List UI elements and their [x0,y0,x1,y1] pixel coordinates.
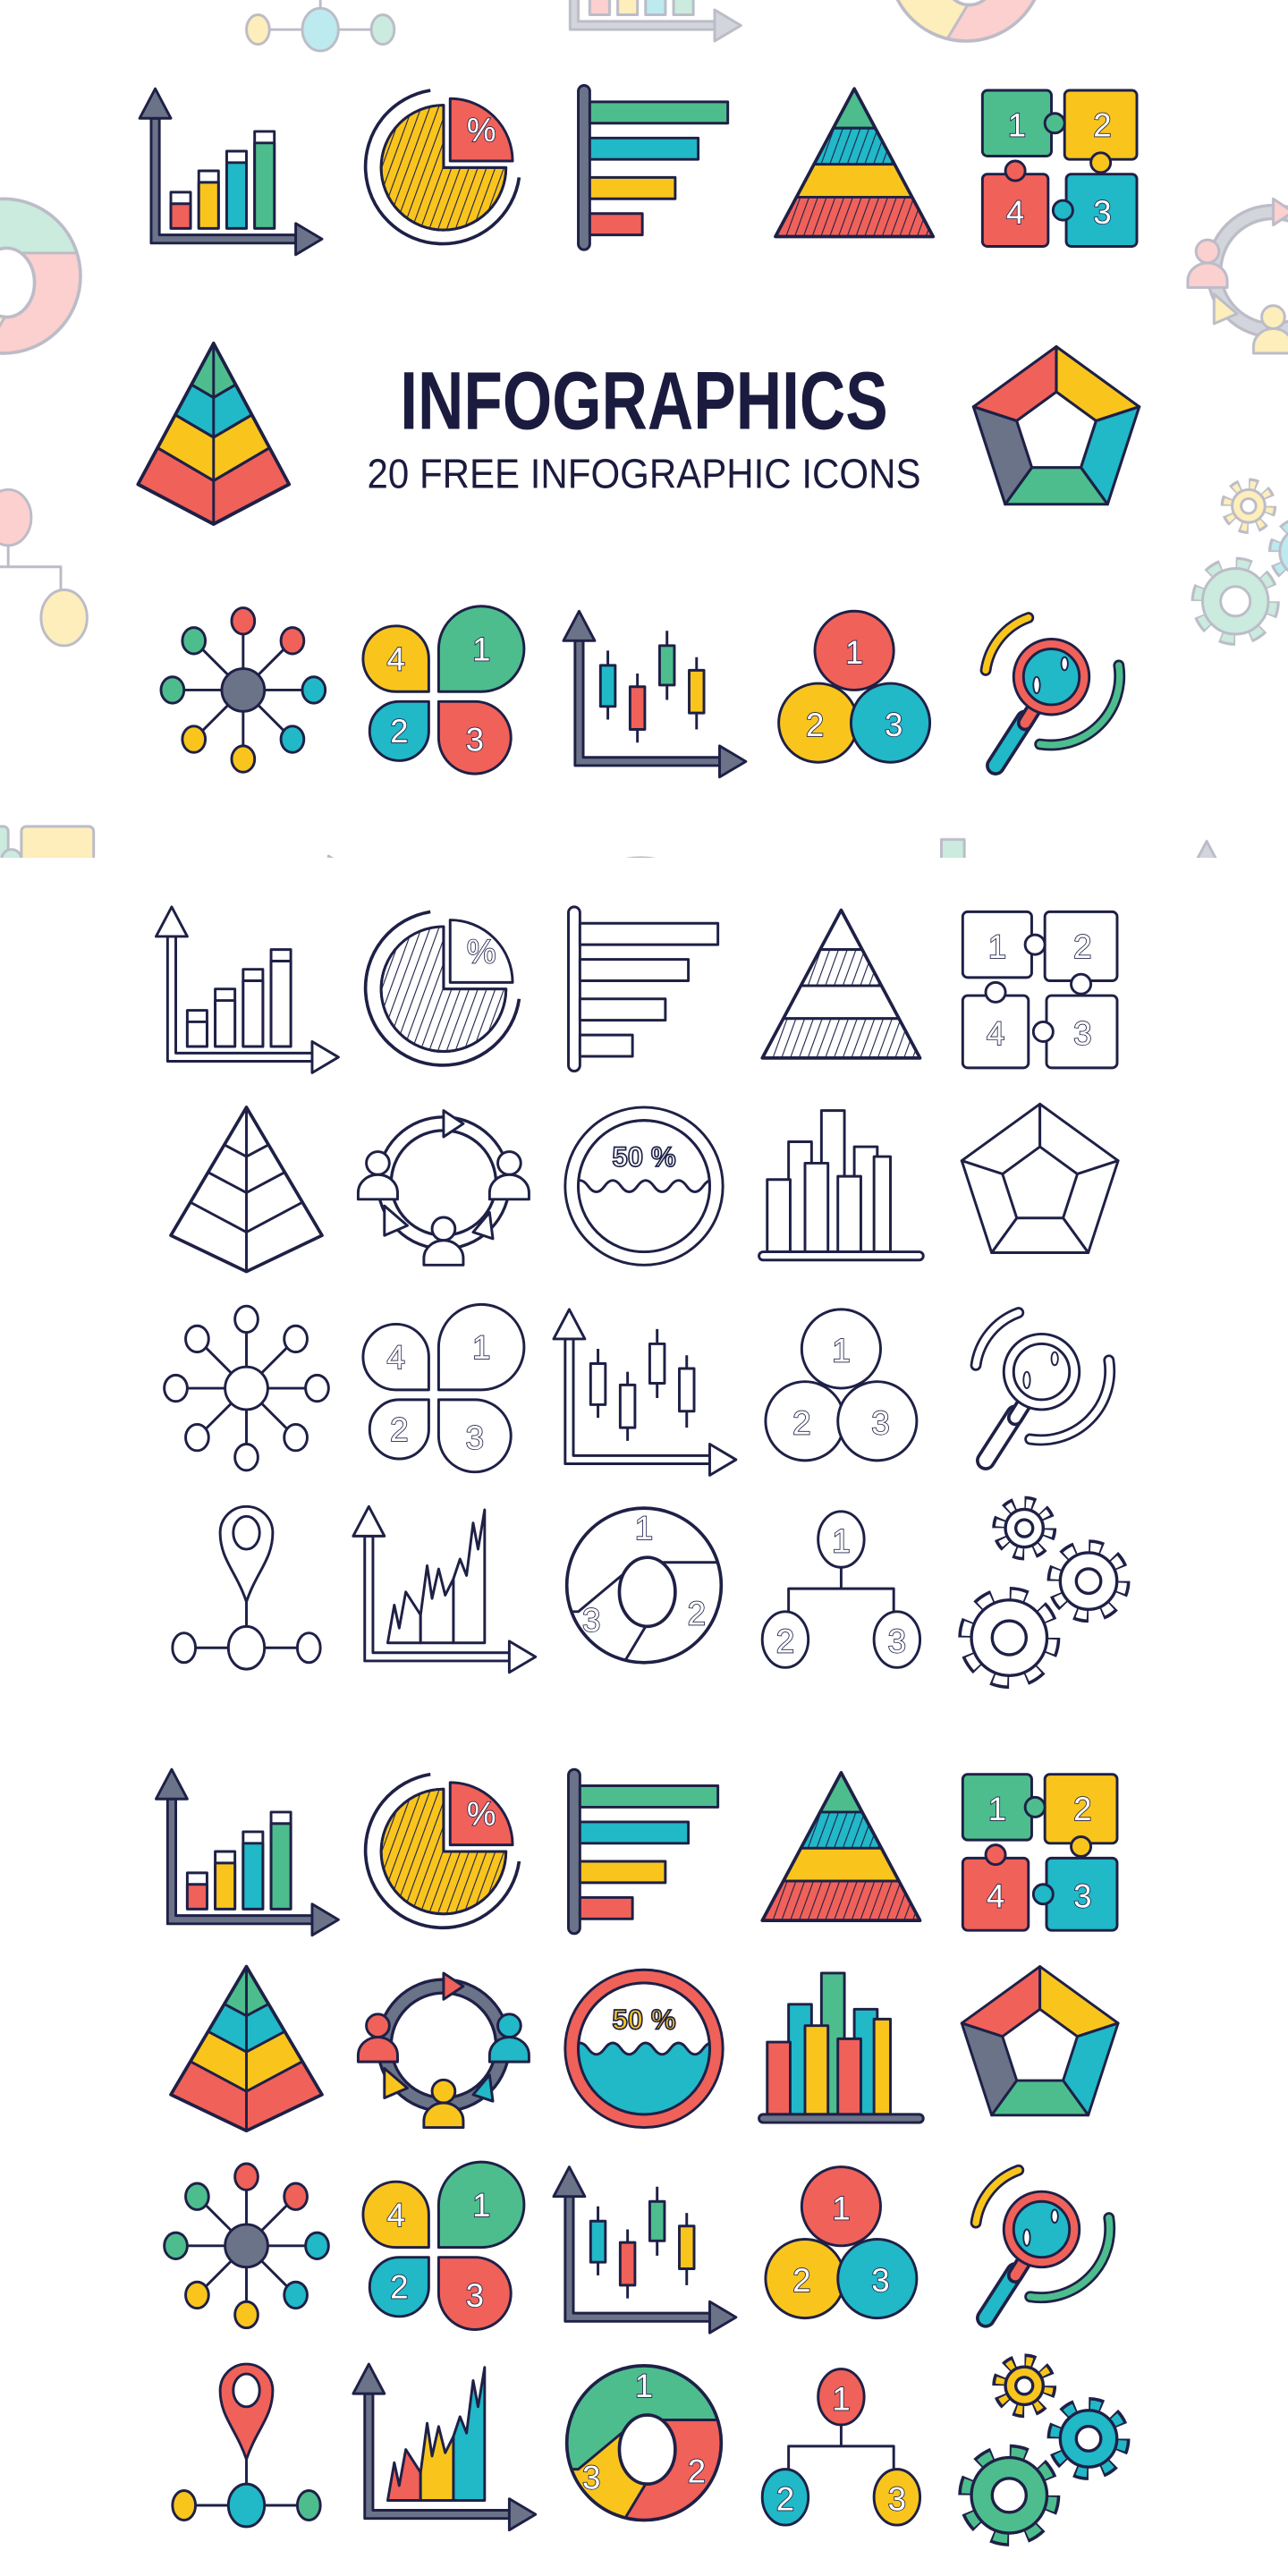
icon: area chart [353,2364,536,2530]
icon: puzzle [962,911,1117,1068]
icon: donut chart: 2 [688,2453,706,2489]
icon: petals [363,606,524,774]
icon: puzzle: 4 [1006,194,1024,231]
icon: 3D pyramid [148,1091,345,1280]
panel: top colored hero section [115,86,1140,777]
icon: puzzle: 2 [1073,928,1092,965]
panel: colored icons [148,1769,1122,2541]
icon: pie chart [366,911,519,1065]
icon: pyramid triangle [759,907,923,1062]
icon: pentagon [973,347,1140,504]
icon: three circles [779,611,930,762]
icon: three circles: 2 [806,707,824,743]
icon: pin network [173,2364,320,2527]
icon: donut chart: 1 [635,2368,653,2404]
icon: puzzle: 4 [987,1015,1004,1052]
icon: donut chart: 1 [635,1510,653,1546]
icon: hierarchy: 3 [888,2481,906,2518]
icon: puzzle: 3 [1073,1015,1092,1052]
icon: area chart [353,1506,536,1673]
icon: pin network [173,1506,320,1669]
icon: hierarchy: 2 [776,2481,794,2518]
icon: pyramid triangle [772,86,936,240]
icon: puzzle: 1 [988,1791,1006,1827]
icon: puzzle: 2 [1073,1791,1092,1827]
icon: magnifier [976,2170,1110,2318]
icon: donut chart: 3 [582,1602,600,1639]
icon: donut chart [546,2344,742,2541]
icon: magnifier [976,1313,1110,1461]
icon: petals: 4 [386,640,405,677]
panel: outline icons [148,907,1122,1684]
icon: bar chart [156,1769,338,1936]
icon: puzzle: 3 [1073,1877,1092,1914]
icon: petals [363,1304,524,1472]
icon: petals: 2 [390,2269,409,2306]
title: INFOGRAPHICS [400,355,888,446]
icon: candlestick chart [554,1309,736,1475]
icon: petals: 4 [386,2197,405,2233]
icon: cycle people [358,1111,529,1265]
icon: pentagon [962,1104,1118,1253]
icon: hierarchy: 3 [888,1623,906,1660]
icon: hierarchy: 1 [832,2380,851,2417]
icon: petals: 1 [472,1329,490,1366]
icon: three circles: 1 [845,634,863,671]
icon: puzzle: 2 [1093,106,1112,143]
icon: three circles: 2 [792,1404,811,1441]
icon: hierarchy: 2 [776,1623,794,1660]
icon: pie chart [366,90,519,244]
icon: three circles: 2 [792,2262,811,2299]
icon: hierarchy: 1 [832,1523,851,1560]
icon: column chart [759,1973,923,2123]
icon: pie chart [366,1775,519,1928]
icon: horizontal bars [569,1769,718,1934]
icon: cycle people [358,1973,529,2128]
icon: horizontal bars [569,907,718,1072]
icon: pie chart: % [467,933,496,970]
icon: pentagon [962,1967,1118,2115]
icon: 50 percent gauge: 50 % [612,1141,676,1173]
icon: three circles: 3 [885,707,902,743]
icon: three circles [766,2167,917,2318]
icon: petals: 3 [466,1419,484,1456]
icon: puzzle [982,90,1137,247]
icon: petals: 1 [472,631,490,667]
icon: donut chart: 3 [582,2460,600,2496]
icon: pie chart: % [467,112,496,148]
icon: three circles [766,1309,917,1461]
icon: three circles: 3 [871,1404,890,1441]
icon: pyramid triangle [759,1769,923,1924]
icon: three circles: 1 [832,1333,851,1369]
icon: 50 percent gauge [565,1107,723,1265]
icon: bar chart [156,907,338,1072]
icon: candlestick chart [564,611,746,777]
icon: petals: 3 [466,2277,484,2314]
icon: petals: 2 [390,713,409,750]
icon: petals [363,2162,524,2329]
icon: three circles: 1 [832,2190,851,2226]
icon: pie chart: % [467,1796,496,1833]
icon: column chart [759,1111,923,1260]
icon: gears [967,2362,1122,2538]
background faded icons [0,0,1288,858]
icon: network [165,2164,328,2328]
icon: puzzle [962,1775,1117,1930]
icon: puzzle: 4 [987,1877,1004,1914]
icon: donut chart [546,1487,742,1684]
icon: puzzle: 1 [1008,106,1026,143]
icon: gears [967,1504,1122,1681]
icon: petals: 4 [386,1339,405,1376]
icon: 3D pyramid [115,326,312,533]
icon: hierarchy [762,1512,920,1667]
icon: horizontal bars [579,86,728,250]
icon: network [161,608,326,772]
subtitle: 20 FREE INFOGRAPHIC ICONS [368,451,920,497]
icon: puzzle: 3 [1093,194,1112,231]
icon: network [165,1306,328,1470]
icon: magnifier [986,618,1120,766]
icon: petals: 3 [466,721,484,758]
icon: 3D pyramid [148,1950,345,2139]
icon: three circles: 3 [871,2262,890,2299]
icon: puzzle: 1 [988,928,1006,965]
icon: 50 percent gauge: 50 % [612,2004,676,2035]
icon: petals: 2 [390,1411,409,1448]
icon: donut chart: 2 [688,1596,706,1632]
icon: candlestick chart [554,2167,736,2333]
icon: bar chart [140,89,322,255]
icon: petals: 1 [472,2187,490,2224]
icon: 50 percent gauge [565,1970,723,2128]
icon: hierarchy [762,2369,920,2525]
